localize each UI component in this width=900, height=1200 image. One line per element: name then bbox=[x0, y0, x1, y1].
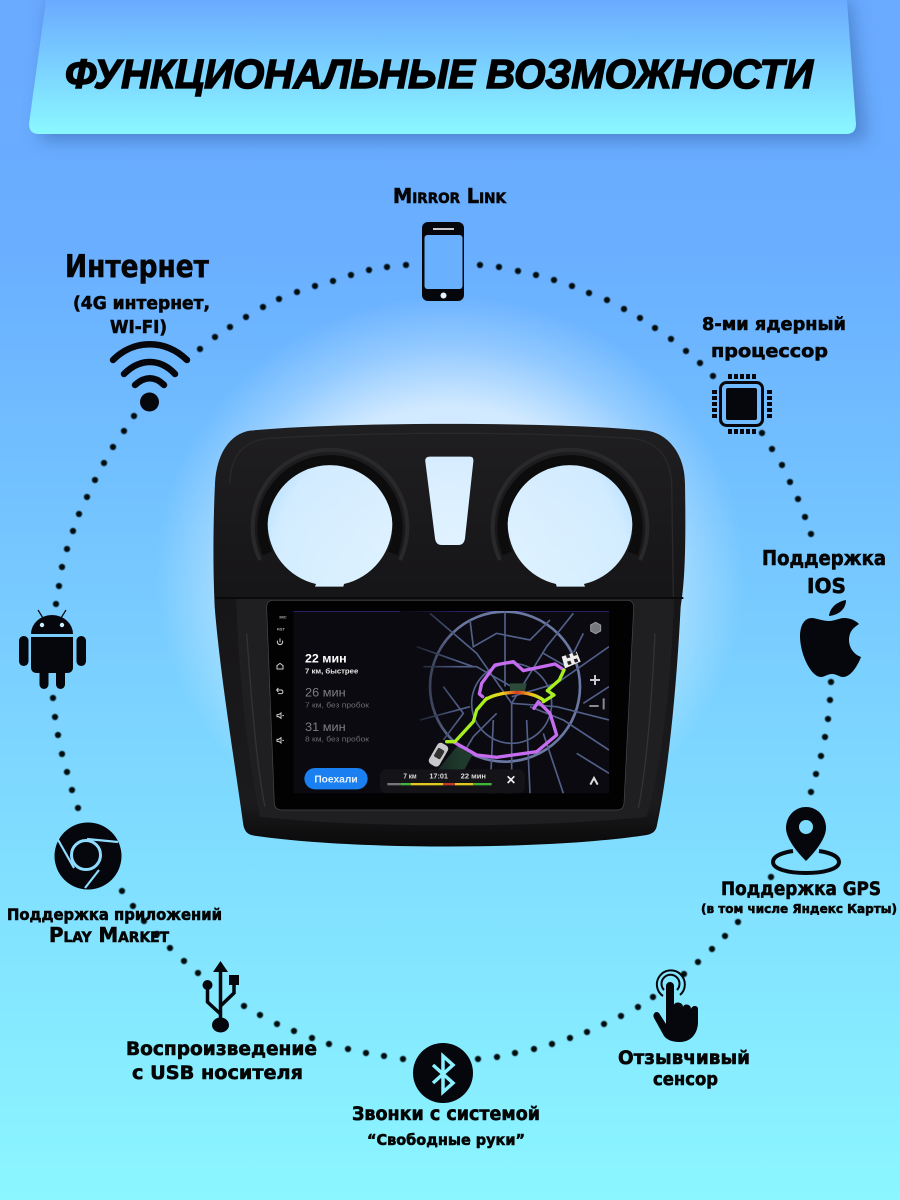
icon: usb bbox=[202, 961, 239, 1032]
go button: Поехали bbox=[314, 774, 358, 785]
label: (в том числе Яндекс Карты) bbox=[701, 901, 897, 916]
feature: USB bbox=[126, 961, 317, 1084]
feature: android icon bbox=[19, 610, 86, 689]
icon: chip bbox=[712, 374, 772, 434]
feature: bluetooth calls bbox=[352, 1043, 540, 1149]
label: 8-ми ядерный bbox=[702, 314, 846, 335]
feature: internet bbox=[65, 249, 210, 412]
icon: map pin bbox=[773, 807, 839, 873]
label bbox=[126, 1038, 317, 1084]
label bbox=[762, 546, 886, 598]
label: internet: Интернет bbox=[65, 249, 209, 285]
label: сенсор bbox=[653, 1069, 718, 1090]
icon: chrome bbox=[54, 822, 122, 890]
label bbox=[7, 905, 222, 947]
title: ФУНКЦИОНАЛЬНЫЕ ВОЗМОЖНОСТИ bbox=[65, 51, 814, 97]
label: Поддержка bbox=[762, 546, 886, 570]
device: head unit bbox=[213, 424, 685, 846]
bezel rings bbox=[230, 433, 673, 597]
header banner bbox=[29, 0, 866, 140]
label: internet: (4G интернет, bbox=[73, 294, 210, 314]
trip bar: 17:01 bbox=[429, 771, 448, 780]
routes bbox=[447, 662, 564, 757]
trip bar bbox=[380, 769, 525, 793]
label: Поддержка приложений bbox=[7, 905, 222, 924]
label: Поддержка GPS bbox=[721, 879, 881, 900]
route list: 8 км, без пробок bbox=[305, 735, 370, 744]
label: internet bbox=[65, 249, 210, 338]
screen bezel bbox=[267, 600, 634, 810]
feature: iOS bbox=[762, 546, 886, 677]
feature: processor bbox=[702, 314, 846, 434]
finish flag bbox=[562, 652, 581, 668]
label: процессор bbox=[711, 341, 828, 362]
lower panel bbox=[236, 597, 674, 825]
side buttons bbox=[277, 615, 287, 743]
label: IOS bbox=[807, 574, 846, 598]
icon: apple bbox=[800, 600, 861, 677]
icon: bluetooth bbox=[413, 1043, 473, 1103]
label: “Свободные руки” bbox=[367, 1131, 525, 1149]
label bbox=[618, 1047, 750, 1090]
car bbox=[428, 742, 448, 767]
label: Звонки с системой bbox=[352, 1103, 540, 1125]
trip bar: 7 км bbox=[403, 771, 417, 780]
label: Воспроизведение bbox=[126, 1038, 317, 1060]
icon: phone bbox=[422, 222, 464, 301]
map bbox=[417, 612, 609, 793]
feature: Play Market bbox=[7, 822, 222, 947]
side buttons: MIC bbox=[279, 615, 287, 620]
gauge bezels bbox=[213, 424, 685, 846]
map controls bbox=[589, 622, 604, 785]
feature: touch sensor bbox=[618, 970, 750, 1090]
route list: 7 км, быстрее bbox=[305, 666, 358, 675]
route list: 7 км, без пробок bbox=[305, 700, 370, 709]
label: с USB носителя bbox=[132, 1062, 303, 1084]
screen bbox=[293, 611, 609, 793]
label: Play Market bbox=[49, 923, 169, 947]
route list: 31 мин bbox=[305, 721, 346, 734]
icon: touch hand bbox=[653, 970, 698, 1042]
route list bbox=[305, 653, 370, 744]
label: Mirror Link bbox=[393, 184, 507, 208]
side buttons: RST bbox=[277, 627, 286, 632]
label bbox=[702, 314, 846, 362]
route list: 22 мин bbox=[305, 653, 347, 666]
label bbox=[352, 1103, 540, 1149]
dotted circle bbox=[53, 265, 831, 1059]
go button bbox=[304, 768, 368, 789]
trip bar: 22 мин bbox=[461, 771, 486, 780]
label: Отзывчивый bbox=[618, 1047, 750, 1069]
route list: 26 мин bbox=[305, 687, 346, 700]
feature: GPS bbox=[701, 807, 897, 916]
icon: wifi bbox=[113, 344, 187, 412]
label bbox=[701, 879, 897, 916]
feature: Mirror Link bbox=[393, 184, 507, 301]
label: internet: WI-FI) bbox=[110, 318, 167, 338]
